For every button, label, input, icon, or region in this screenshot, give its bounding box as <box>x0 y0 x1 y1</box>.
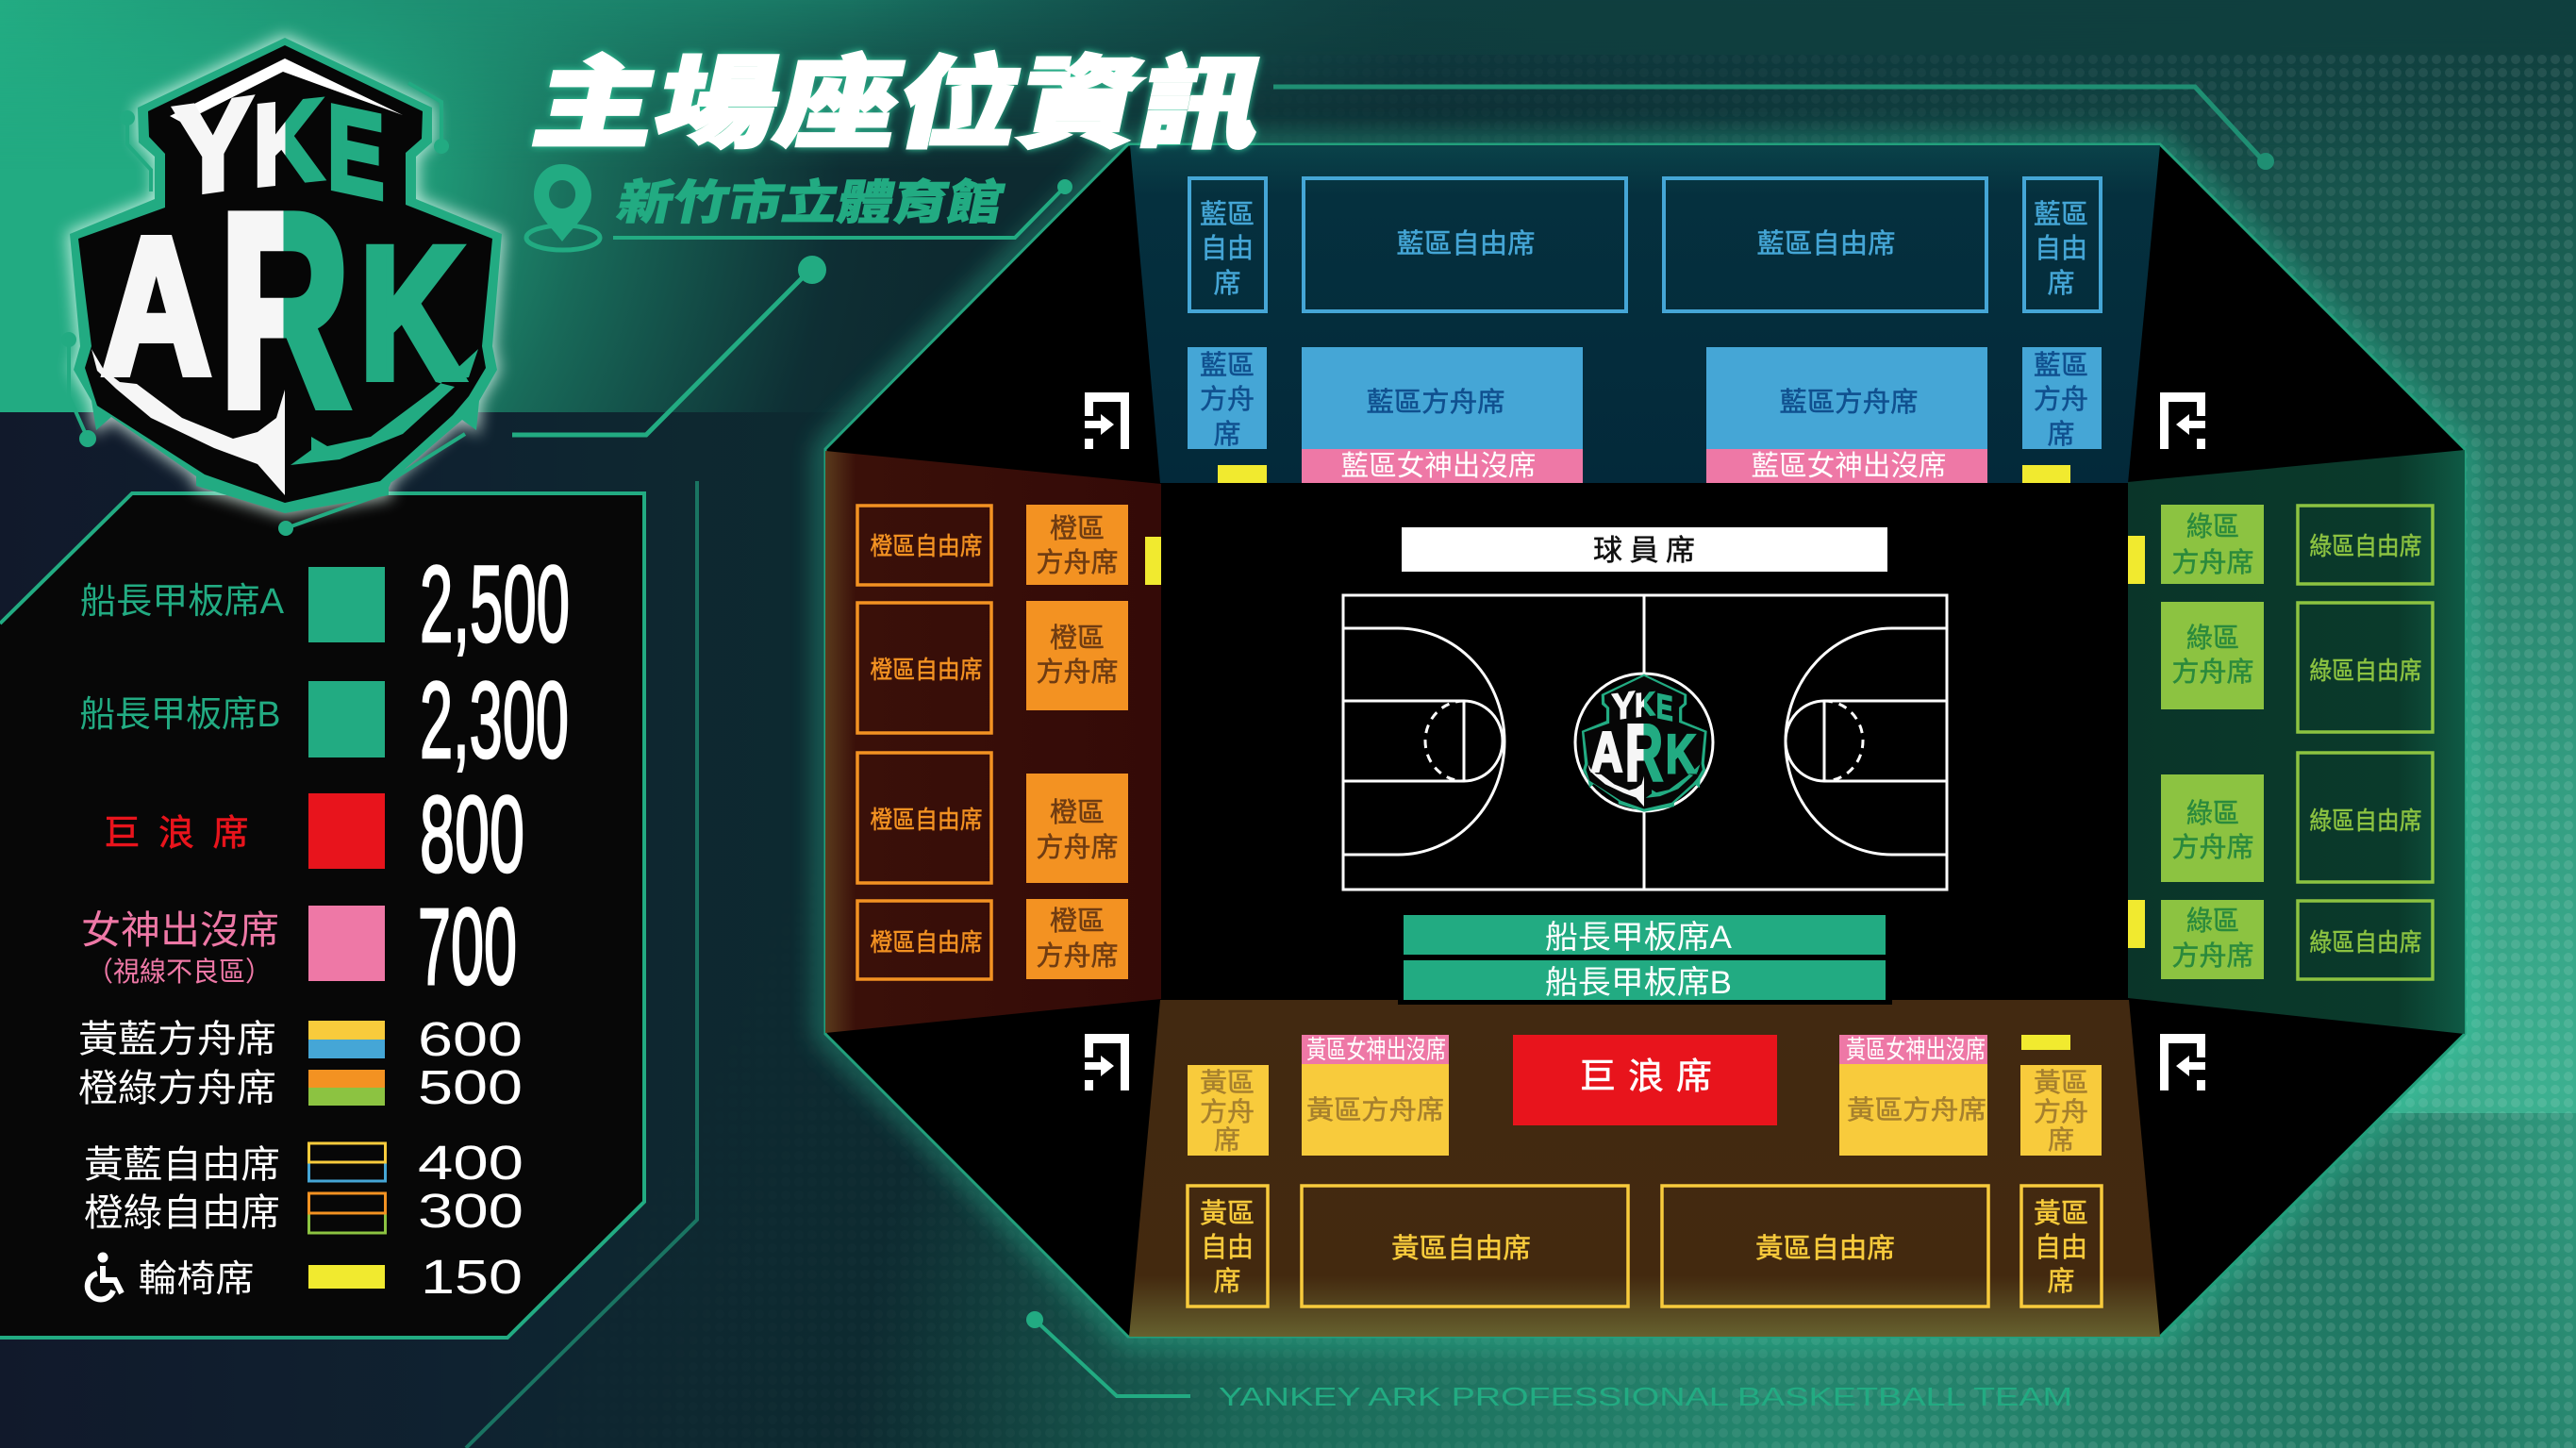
legend: orange green free: 橙綠自由席 <box>84 1192 280 1234</box>
legend: yellow blue ark <box>78 1012 523 1066</box>
orange ark seat labels: 方舟席 <box>1036 940 1119 972</box>
legend: goddess seat: 女神出沒席 <box>81 908 279 952</box>
blue free seat labels: 自由 <box>1201 233 1254 264</box>
yellow ark seat labels: 黃區方舟席 <box>1306 1095 1444 1124</box>
legend: captain deck B: 船長甲板席B <box>79 695 281 735</box>
legend: captain deck A: 船長甲板席A <box>80 582 285 622</box>
title: 主場座位資訊 <box>524 48 1274 160</box>
yellow goddess seats: 黃區女神出沒席 <box>1846 1036 1986 1064</box>
center court logo <box>1582 674 1707 812</box>
giant wave seat <box>1513 1035 1777 1125</box>
circuit lines <box>466 87 2274 1448</box>
legend: giant wave seat: 800 <box>420 774 524 895</box>
orange free seat labels: 橙區自由席 <box>870 928 983 957</box>
blue wheelchair seats <box>1218 465 2070 483</box>
center court logo: A <box>1591 722 1622 784</box>
region: orange <box>825 451 1161 1033</box>
legend: orange green ark: 橙綠方舟席 <box>78 1068 276 1109</box>
orange free seats <box>857 506 991 979</box>
yellow free seats <box>1188 1186 2102 1307</box>
legend: goddess seat: （視線不良區） <box>87 957 272 988</box>
yellow goddess seats <box>1302 1035 1987 1064</box>
green free seat labels: 綠區自由席 <box>2309 928 2422 957</box>
green ark seat labels: 方舟席 <box>2171 832 2254 863</box>
logo letters YKE: K <box>253 75 324 211</box>
blue free seat labels: 藍區 <box>2034 199 2088 230</box>
yellow ark seats <box>1188 1064 2102 1156</box>
legend: captain deck A: 2,500 <box>420 544 570 665</box>
region: green <box>2128 450 2465 1034</box>
captain deck B bar: 船長甲板席B <box>1545 965 1732 1001</box>
blue ark seat labels: 藍區 <box>1200 350 1255 381</box>
orange ark seat labels: 方舟席 <box>1036 832 1119 863</box>
legend panel <box>0 493 644 1338</box>
yellow ark seat labels: 黃區 <box>1200 1068 1255 1097</box>
footer tagline: YANKEY ARK PROFESSIONAL BASKETBALL TEAM <box>1219 1382 2072 1411</box>
yellow ark seat labels: 黃區 <box>2034 1068 2088 1097</box>
blue free seat labels: 藍區自由席 <box>1756 228 1896 259</box>
blue free seat labels: 自由 <box>2035 233 2087 264</box>
center court logo: Y <box>1611 684 1635 728</box>
legend: wheelchair seat: 150 <box>421 1250 523 1304</box>
legend: yellow blue ark: 600 <box>418 1012 523 1066</box>
green ark seat labels: 綠區 <box>2186 906 2239 937</box>
logo letters ARK: R <box>219 155 351 465</box>
orange ark seat labels: 橙區 <box>1050 906 1105 937</box>
orange ark seat labels: 橙區 <box>1050 513 1105 544</box>
blue free seat labels: 藍區自由席 <box>1396 228 1536 259</box>
green ark seat labels <box>2171 511 2254 972</box>
green ark seat labels: 方舟席 <box>2171 547 2254 578</box>
blue ark seat labels: 席 <box>1213 419 1241 450</box>
legend: goddess seat <box>81 887 517 1007</box>
icon: exit top left <box>1085 392 1129 449</box>
blue ark seat labels: 藍區方舟席 <box>1366 387 1505 418</box>
legend: giant wave seat: 巨浪席 <box>104 814 249 854</box>
logo letters ARK: K <box>360 209 463 418</box>
logo shield <box>70 38 502 513</box>
region: yellow <box>1129 1000 2160 1337</box>
basketball court <box>1343 595 1947 890</box>
icon: exit bottom left <box>1085 1034 1129 1090</box>
blue ark seat labels: 方舟 <box>2034 384 2088 415</box>
green ark seat labels: 方舟席 <box>2171 940 2254 972</box>
yellow free seat labels: 席 <box>2047 1266 2075 1297</box>
orange free seat labels: 橙區自由席 <box>870 656 983 684</box>
legend: orange green ark <box>78 1060 523 1114</box>
logo letters YKE: E <box>327 80 385 225</box>
orange wheelchair seat <box>1145 537 1161 585</box>
player bench: 球員席 <box>1593 534 1695 567</box>
legend: yellow blue free: 400 <box>418 1136 524 1190</box>
green free seat labels: 綠區自由席 <box>2309 532 2422 560</box>
green ark seat labels: 綠區 <box>2186 623 2239 654</box>
subtitle: 新竹市立體育館 <box>613 176 1009 229</box>
yellow ark seat labels: 席 <box>1214 1125 1240 1155</box>
logo letters YKE: Y <box>173 71 254 225</box>
yellow free seat labels: 黃區 <box>1200 1198 1255 1229</box>
blue ark seat labels: 藍區 <box>2034 350 2088 381</box>
legend: orange green ark: 500 <box>418 1060 523 1114</box>
legend: orange green free: 300 <box>418 1184 524 1238</box>
subtitle underline <box>613 181 1071 238</box>
legend: orange green free <box>84 1184 524 1238</box>
logo letters ARK: A <box>102 198 210 413</box>
player bench <box>1402 527 1887 572</box>
legend: yellow blue free <box>84 1136 524 1190</box>
logo letters YKE <box>173 71 385 225</box>
green free seats <box>2298 506 2433 979</box>
yellow free seat labels: 黃區 <box>2034 1198 2088 1229</box>
yellow ark seat labels: 方舟 <box>2034 1097 2088 1126</box>
green ark seats <box>2161 505 2264 979</box>
blue ark seats <box>1188 347 2102 449</box>
blue free seat labels <box>1200 199 2088 299</box>
blue goddess seats: 藍區女神出沒席 <box>1341 451 1536 482</box>
green free seat labels: 綠區自由席 <box>2309 657 2422 685</box>
blue ark seat labels: 藍區方舟席 <box>1779 387 1919 418</box>
yellow wheelchair seat <box>2021 1035 2070 1050</box>
blue goddess seats <box>1302 449 1987 483</box>
green ark seat labels: 綠區 <box>2186 798 2239 829</box>
yellow free seat labels: 自由 <box>1201 1232 1254 1263</box>
logo swoosh left <box>91 349 285 495</box>
center court logo: K <box>1666 724 1696 784</box>
legend: giant wave seat <box>104 774 524 895</box>
blue free seats <box>1189 178 2101 311</box>
yellow ark seat labels: 席 <box>2048 1125 2074 1155</box>
yellow ark seat labels <box>1200 1068 2088 1155</box>
legend: wheelchair seat <box>88 1250 523 1304</box>
center court logo: E <box>1656 686 1673 728</box>
icon: exit bottom right <box>2160 1034 2205 1090</box>
blue free seat labels: 藍區 <box>1200 199 1255 230</box>
orange ark seats <box>1026 505 1128 979</box>
logo circuit traces <box>63 83 465 534</box>
blue free seat labels: 席 <box>2047 268 2075 299</box>
blue free seat labels: 席 <box>1213 268 1241 299</box>
legend: wheelchair seat: 輪椅席 <box>138 1259 255 1300</box>
captain deck B bar <box>1404 960 1886 1001</box>
icon: location pin <box>526 164 600 250</box>
logo swoosh right <box>291 349 478 465</box>
blue goddess seats: 藍區女神出沒席 <box>1751 451 1947 482</box>
green ark seat labels: 綠區 <box>2186 511 2239 542</box>
giant wave seat: 巨浪席 <box>1580 1057 1712 1097</box>
yellow free seat labels: 黃區自由席 <box>1391 1233 1531 1264</box>
icon: exit top right <box>2160 392 2205 449</box>
blue ark seat labels <box>1200 350 2088 450</box>
captain deck A bar <box>1404 915 1886 956</box>
logo top highlight <box>170 58 403 123</box>
green free seat labels <box>2309 532 2422 957</box>
yellow goddess seats: 黃區女神出沒席 <box>1306 1036 1446 1064</box>
orange ark seat labels: 方舟席 <box>1036 547 1119 578</box>
main logo <box>63 38 502 534</box>
region: blue <box>1130 145 2160 483</box>
orange ark seat labels: 橙區 <box>1050 797 1105 828</box>
yellow free seat labels: 自由 <box>2035 1232 2087 1263</box>
blue ark seat labels: 席 <box>2047 419 2075 450</box>
legend: captain deck B <box>79 660 569 781</box>
legend: captain deck B: 2,300 <box>420 660 569 781</box>
center court logo: K <box>1635 684 1655 724</box>
center court logo: R <box>1625 709 1663 798</box>
orange ark seat labels <box>1036 513 1119 972</box>
yellow free seat labels <box>1200 1198 2088 1297</box>
blue ark seat labels: 方舟 <box>1200 384 1255 415</box>
yellow ark seat labels: 方舟 <box>1200 1097 1255 1126</box>
logo letters ARK <box>102 155 463 465</box>
orange ark seat labels: 橙區 <box>1050 623 1105 654</box>
green ark seat labels: 方舟席 <box>2171 657 2254 688</box>
icon: wheelchair <box>88 1253 122 1299</box>
legend: goddess seat: 700 <box>418 887 517 1007</box>
yellow free seat labels: 席 <box>1213 1266 1241 1297</box>
captain deck A bar: 船長甲板席A <box>1545 920 1732 956</box>
green wheelchair seats <box>2128 536 2145 948</box>
yellow ark seat labels: 黃區方舟席 <box>1847 1095 1986 1124</box>
green free seat labels: 綠區自由席 <box>2309 807 2422 835</box>
legend: captain deck A <box>80 544 570 665</box>
orange free seat labels: 橙區自由席 <box>870 532 983 560</box>
legend: yellow blue free: 黃藍自由席 <box>84 1144 280 1186</box>
orange free seat labels <box>870 532 983 957</box>
orange ark seat labels: 方舟席 <box>1036 657 1119 688</box>
orange free seat labels: 橙區自由席 <box>870 806 983 834</box>
octagon arena <box>825 144 2465 1337</box>
yellow free seat labels: 黃區自由席 <box>1755 1233 1895 1264</box>
legend: yellow blue ark: 黃藍方舟席 <box>78 1019 276 1060</box>
